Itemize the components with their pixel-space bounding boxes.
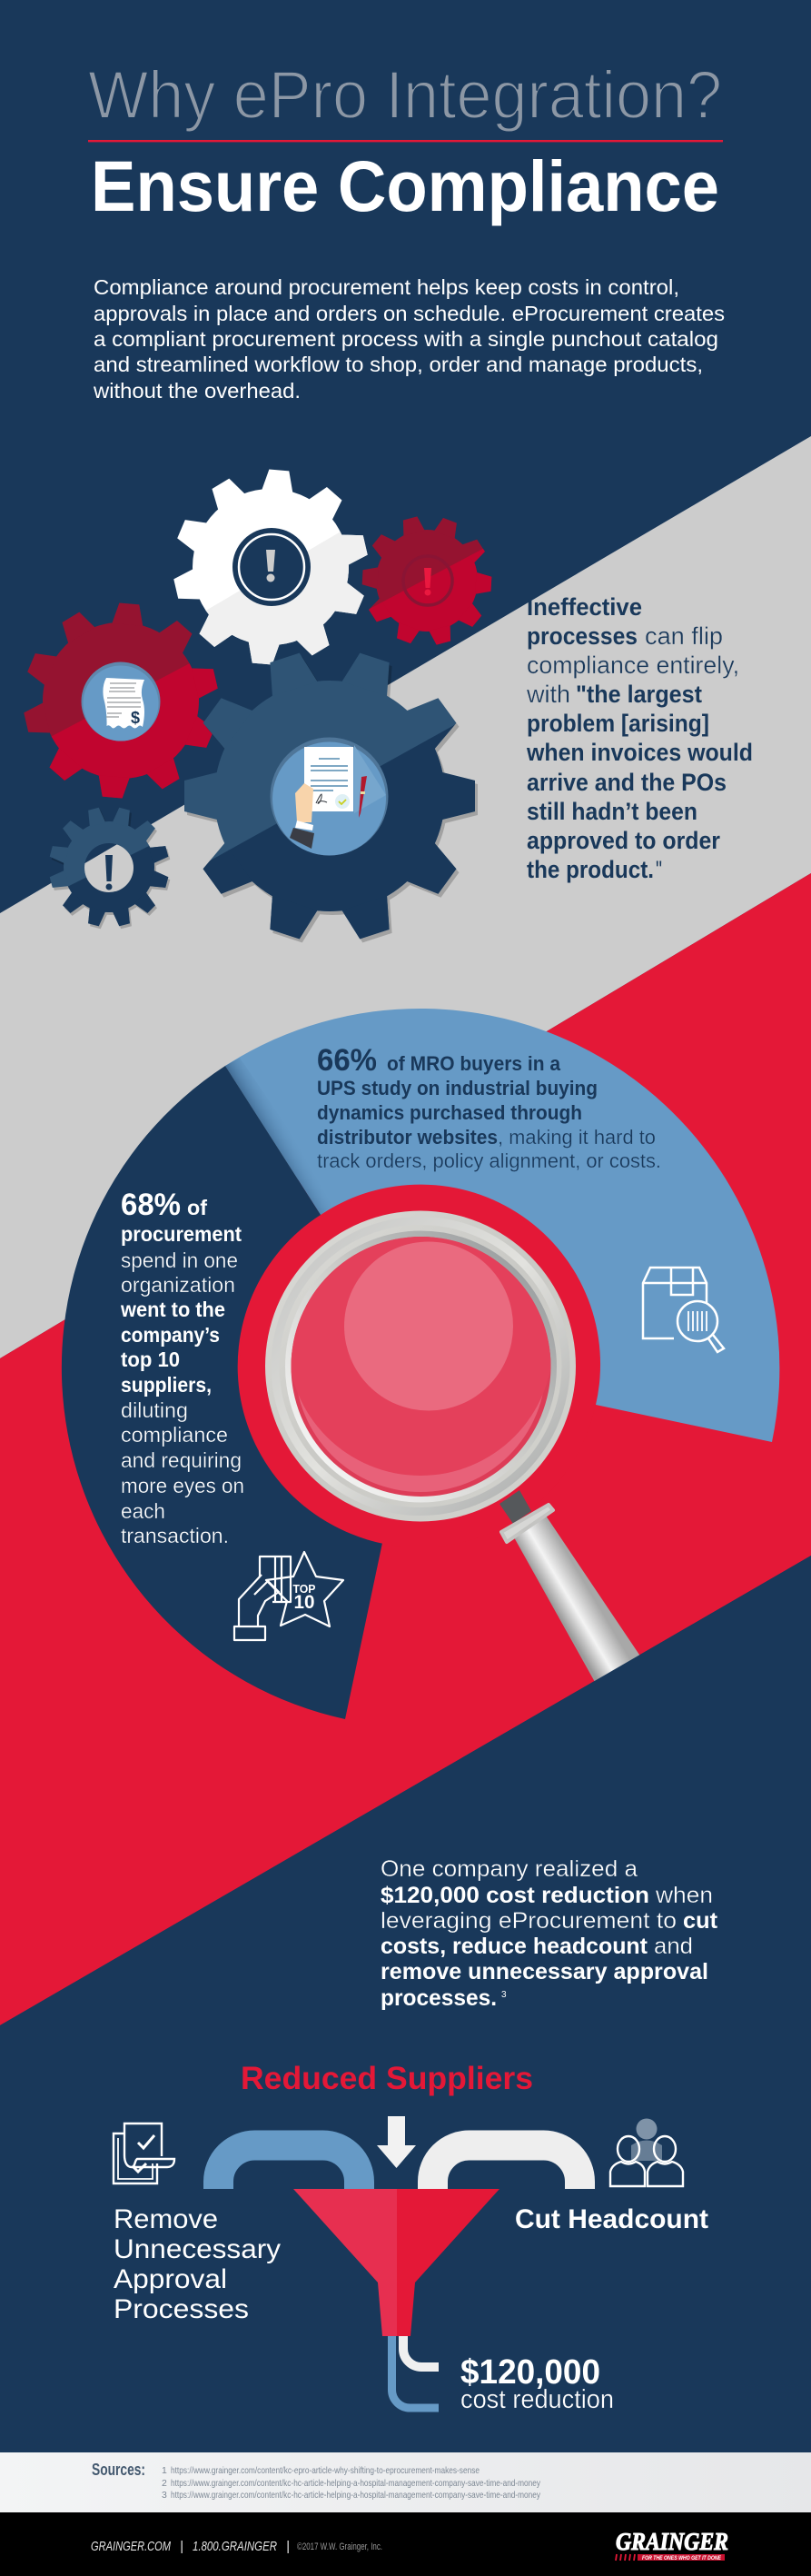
text: 66% statistic: UPS study on industrial buying	[317, 1077, 598, 1099]
title: Why ePro Integration: Why ePro Integration?	[88, 57, 722, 133]
footer contact text: |	[286, 2539, 290, 2554]
text: 66% statistic: dynamics purchased through	[317, 1101, 582, 1124]
text: ineffective processes quote: "the largest	[576, 681, 702, 708]
text: 68% statistic: spend in one	[121, 1248, 238, 1272]
text: ineffective processes quote	[526, 593, 753, 883]
text: $120,000 cost reduction paragraph: remove unnecessary approval	[381, 1959, 708, 1984]
icon: approval checklist	[114, 2123, 174, 2183]
gear: large navy document gear	[184, 651, 478, 945]
logo: Grainger: GRAINGER	[616, 2528, 728, 2555]
logo: Grainger: FOR THE ONES WHO GET IT DONE	[642, 2556, 722, 2561]
intro paragraph	[93, 275, 725, 403]
text: ineffective processes quote: can flip	[645, 622, 723, 650]
text: 68% statistic: 68%	[121, 1188, 181, 1222]
footer bar	[0, 2512, 811, 2576]
text: $120,000 cost reduction paragraph: processes.	[381, 1985, 497, 2011]
label: remove unnecessary approval processes: Unnecessary	[114, 2234, 281, 2264]
footer contact text: GRAINGER.COM	[91, 2539, 171, 2554]
text: 68% statistic: compliance	[121, 1423, 228, 1447]
footer contact text: 1.800.GRAINGER	[193, 2539, 277, 2554]
text: 68% statistic: each	[121, 1499, 165, 1523]
text: 66% statistic	[317, 1043, 661, 1172]
sources panel: 3	[162, 2490, 167, 2501]
text: $120,000 cost reduction paragraph: leveraging eProcurement to	[381, 1908, 677, 1934]
output pipe: blue	[392, 2336, 439, 2408]
icon: people	[610, 2119, 683, 2186]
pie panel: blue 66% sector	[225, 1009, 779, 1442]
footer contact text	[91, 2539, 382, 2554]
intro paragraph: without the overhead.	[93, 379, 301, 403]
intro paragraph: a compliant procurement process with a single punchout catalog	[94, 327, 718, 351]
text: ineffective processes quote: "	[656, 856, 662, 883]
text: 68% statistic: of	[187, 1196, 207, 1219]
intro paragraph: and streamlined workflow to shop, order and manage products,	[94, 353, 703, 376]
text: 68% statistic: procurement	[121, 1222, 242, 1246]
icon: down arrow	[377, 2116, 416, 2168]
text: $120,000 cost reduction paragraph: costs, reduce headcount	[381, 1934, 648, 1959]
pie panel: navy 68% sector	[62, 1066, 382, 1719]
text: ineffective processes quote: processes	[527, 622, 638, 650]
text: 66% statistic: 66%	[317, 1043, 377, 1078]
text: $120,000 cost reduction paragraph: and	[654, 1934, 693, 1959]
icon: top 10 star and hand	[234, 1552, 343, 1640]
gear: small red warning gear	[361, 515, 492, 646]
text: 68% statistic: organization	[121, 1273, 235, 1297]
background: gray diagonal band	[0, 436, 811, 1358]
intro paragraph: Compliance around procurement helps keep costs in control,	[94, 275, 679, 299]
label: remove unnecessary approval processes: Remove	[114, 2204, 218, 2234]
text: $120,000 cost reduction paragraph: $120,000 cost reduction	[381, 1883, 649, 1908]
text: ineffective processes quote: the product.	[527, 856, 654, 883]
heading: Reduced Suppliers: Reduced Suppliers	[241, 2061, 533, 2096]
gear: small navy warning gear	[49, 807, 171, 930]
text: 68% statistic: suppliers,	[121, 1373, 212, 1397]
sources panel	[0, 2452, 811, 2512]
text: 68% statistic: transaction.	[121, 1524, 229, 1547]
label: $120,000 cost reduction: $120,000	[460, 2353, 600, 2392]
magnifying glass	[265, 1210, 645, 1690]
sources panel: https://www.grainger.com/content/kc-hc-article-helping-a-hospital-management-company-save-time-and-money	[171, 2478, 541, 2489]
label: remove unnecessary approval processes	[114, 2204, 281, 2324]
text: ineffective processes quote: approved to order	[527, 827, 720, 854]
footer contact text: |	[180, 2539, 183, 2554]
icon: receipt: $	[131, 709, 140, 727]
text: ineffective processes quote: compliance entirely,	[527, 651, 739, 679]
text: ineffective processes quote: problem [arising]	[527, 710, 709, 737]
text: 68% statistic	[120, 1188, 244, 1547]
text: ineffective processes quote: Ineffective	[527, 593, 642, 621]
text: $120,000 cost reduction paragraph: cut	[683, 1908, 718, 1934]
icon: box with barcode magnifier	[643, 1268, 724, 1352]
text: 68% statistic: and requiring	[121, 1448, 242, 1472]
text: ineffective processes quote: arrive and the POs	[527, 769, 727, 796]
label: remove unnecessary approval processes: Processes	[114, 2294, 249, 2324]
icon: top 10 star and hand: 10	[294, 1592, 314, 1613]
text: ineffective processes quote: when invoices would	[526, 739, 753, 766]
sources panel: https://www.grainger.com/content/kc-epro-article-why-shifting-to-eprocurement-makes-sense	[171, 2465, 480, 2476]
text: 66% statistic: distributor websites	[317, 1126, 498, 1149]
pipe: white headcount	[432, 2145, 579, 2189]
text: ineffective processes quote: still hadn’t been	[527, 798, 697, 825]
sources panel: https://www.grainger.com/content/kc-hc-article-helping-a-hospital-management-company-save-time-and-money	[171, 2490, 541, 2501]
sources panel: Sources:	[92, 2461, 145, 2479]
text: $120,000 cost reduction paragraph	[381, 1856, 718, 2011]
red center disk	[240, 1188, 599, 1547]
sources panel: 1	[162, 2465, 167, 2476]
label: cut headcount: Cut Headcount	[515, 2204, 708, 2234]
label: $120,000 cost reduction	[460, 2353, 614, 2414]
text: $120,000 cost reduction paragraph: 3	[501, 1990, 507, 2000]
sources panel: 2	[162, 2478, 167, 2489]
icon: receipt	[103, 678, 144, 729]
gear: white warning gear	[173, 469, 369, 665]
gear: red receipt gear	[23, 602, 219, 799]
text: $120,000 cost reduction paragraph: One company realized a	[381, 1856, 638, 1882]
output pipe: white	[403, 2336, 439, 2367]
footer contact text: ©2017 W.W. Grainger, Inc.	[297, 2541, 382, 2552]
text: 68% statistic: top 10	[121, 1348, 180, 1371]
pipe: blue approval	[218, 2145, 360, 2189]
label: remove unnecessary approval processes: Approval	[114, 2264, 227, 2294]
bottom navy panel	[0, 1556, 811, 2453]
text: 66% statistic: of MRO buyers in a	[387, 1052, 561, 1075]
text: 66% statistic: , making it hard to	[498, 1126, 656, 1149]
text: 68% statistic: company’s	[121, 1323, 220, 1347]
title divider	[88, 140, 723, 142]
magnifier handle	[499, 1490, 645, 1690]
icon: signed document in hand	[290, 747, 367, 849]
funnel	[293, 2189, 499, 2336]
label: $120,000 cost reduction: cost reduction	[460, 2385, 614, 2414]
icon: top 10 star and hand: TOP	[292, 1582, 316, 1596]
text: $120,000 cost reduction paragraph: when	[655, 1883, 713, 1908]
intro paragraph: approvals in place and orders on schedule. eProcurement creates	[94, 302, 725, 325]
text: ineffective processes quote: with	[526, 681, 570, 708]
background: red diagonal band	[0, 873, 811, 2025]
text: 66% statistic: track orders, policy alignment, or costs.	[317, 1149, 661, 1172]
text: 68% statistic: went to the	[120, 1298, 225, 1321]
text: 68% statistic: more eyes on	[121, 1474, 244, 1497]
heading: Ensure Compliance: Ensure Compliance	[91, 145, 719, 226]
text: 68% statistic: diluting	[121, 1398, 188, 1422]
